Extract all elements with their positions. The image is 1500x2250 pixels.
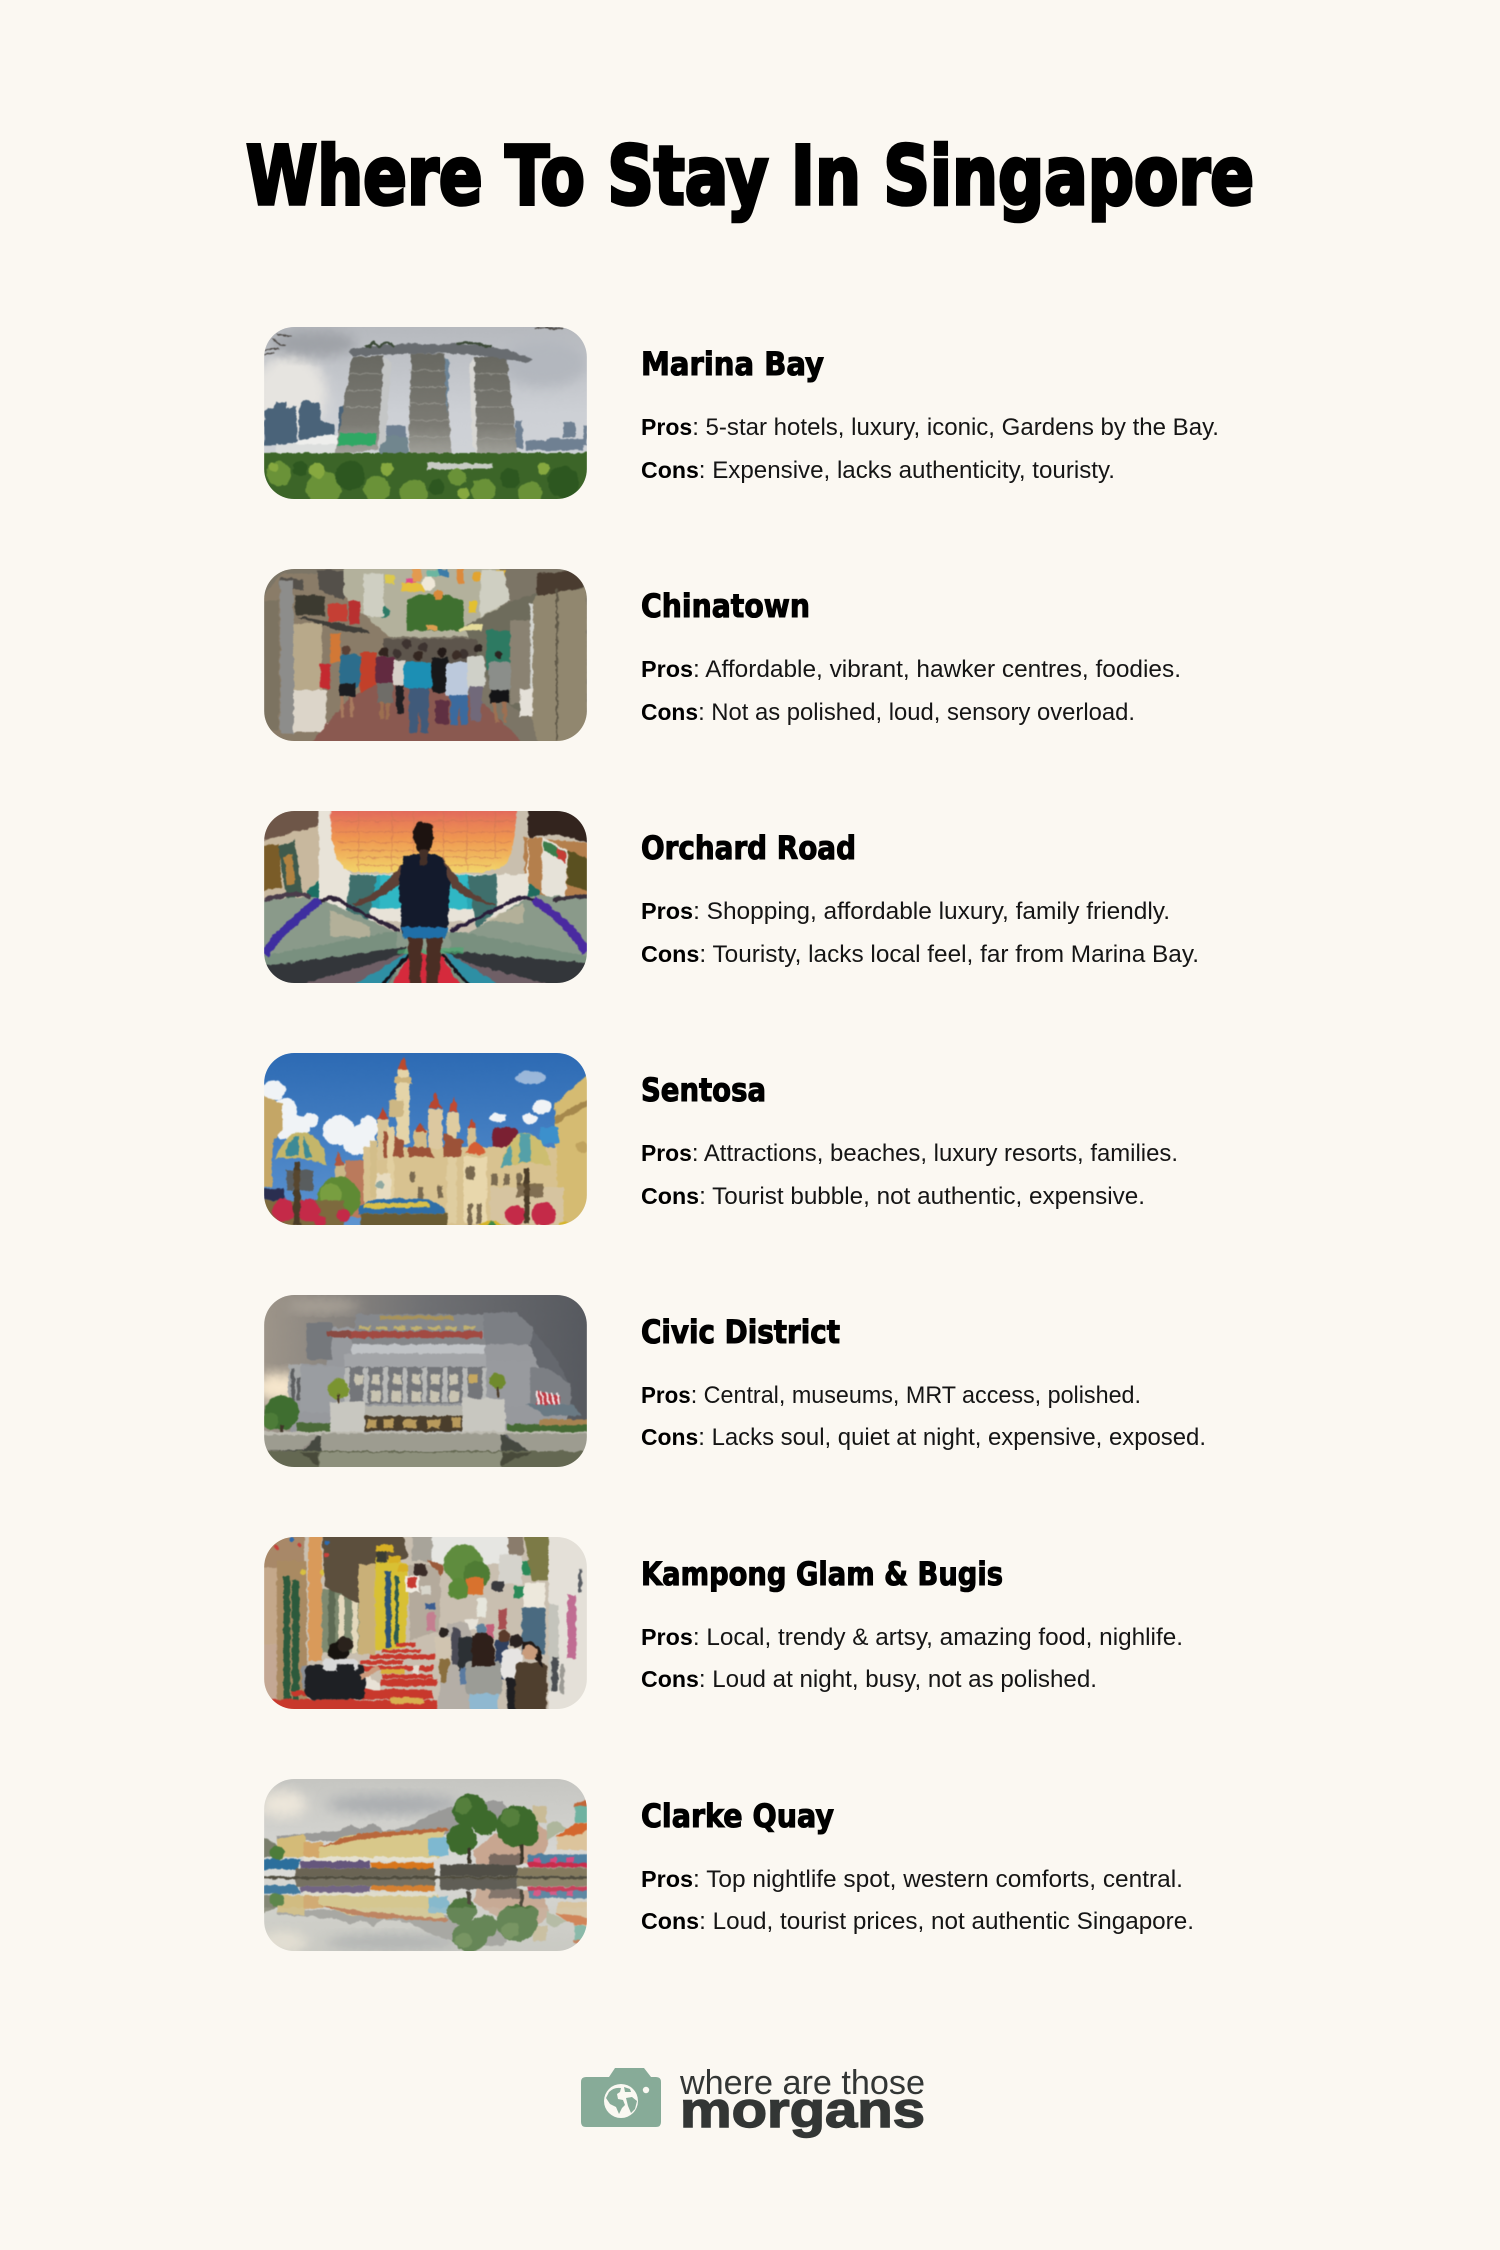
photo: Sentosa castle	[264, 1053, 587, 1225]
photo: Orchard Road escalator	[264, 811, 587, 983]
wordmark line 1: where are those	[679, 2064, 925, 2102]
place name: Clarke Quay	[641, 1797, 834, 1835]
logo: where are those morgans	[581, 2064, 925, 2138]
place name: Chinatown	[641, 587, 810, 625]
pros: Pros: 5-star hotels, luxury, iconic, Gardens by the Bay.	[641, 414, 1219, 441]
cons: Cons: Loud, tourist prices, not authentic Singapore.	[641, 1908, 1194, 1935]
cons: Cons: Loud at night, busy, not as polished.	[641, 1666, 1097, 1693]
cons: Cons: Expensive, lacks authenticity, touristy.	[641, 457, 1115, 484]
photo: Clarke Quay river	[264, 1779, 587, 1951]
panel: Sentosa	[264, 1053, 1176, 1225]
place name: Orchard Road	[641, 829, 856, 867]
pros: Pros: Top nightlife spot, western comforts, central.	[641, 1866, 1183, 1893]
cons: Cons: Touristy, lacks local feel, far from Marina Bay.	[641, 941, 1199, 968]
panel: Marina Bay	[264, 327, 1217, 499]
pros: Pros: Affordable, vibrant, hawker centres, foodies.	[641, 656, 1181, 683]
pros: Pros: Local, trendy & artsy, amazing food, nighlife.	[641, 1624, 1183, 1651]
panel: Chinatown	[264, 569, 1179, 741]
place name: Kampong Glam & Bugis	[641, 1555, 1003, 1593]
icon: camera with globe	[581, 2068, 661, 2127]
panel: Orchard Road	[264, 811, 1197, 983]
cons: Cons: Tourist bubble, not authentic, expensive.	[641, 1183, 1145, 1210]
place name: Sentosa	[641, 1071, 766, 1109]
panel: Clarke Quay	[264, 1779, 1192, 1951]
photo: Fullerton Hotel	[264, 1295, 587, 1467]
pros: Pros: Central, museums, MRT access, polished.	[641, 1382, 1141, 1409]
photo: Haji Lane	[264, 1537, 587, 1709]
cons: Cons: Not as polished, loud, sensory overload.	[641, 699, 1135, 726]
wordmark line 2: morgans	[680, 2082, 925, 2138]
pros: Pros: Attractions, beaches, luxury resorts, families.	[641, 1140, 1178, 1167]
place name: Marina Bay	[641, 345, 824, 383]
photo: Marina Bay Sands	[264, 327, 587, 499]
panel: Civic District	[264, 1295, 1204, 1467]
place name: Civic District	[641, 1313, 840, 1351]
cons: Cons: Lacks soul, quiet at night, expensive, exposed.	[641, 1424, 1206, 1451]
title: Where To Stay In Singapore	[246, 130, 1254, 224]
photo: Chinatown street	[264, 569, 587, 741]
pros: Pros: Shopping, affordable luxury, family friendly.	[641, 898, 1170, 925]
panel: Kampong Glam & Bugis	[264, 1537, 1181, 1709]
